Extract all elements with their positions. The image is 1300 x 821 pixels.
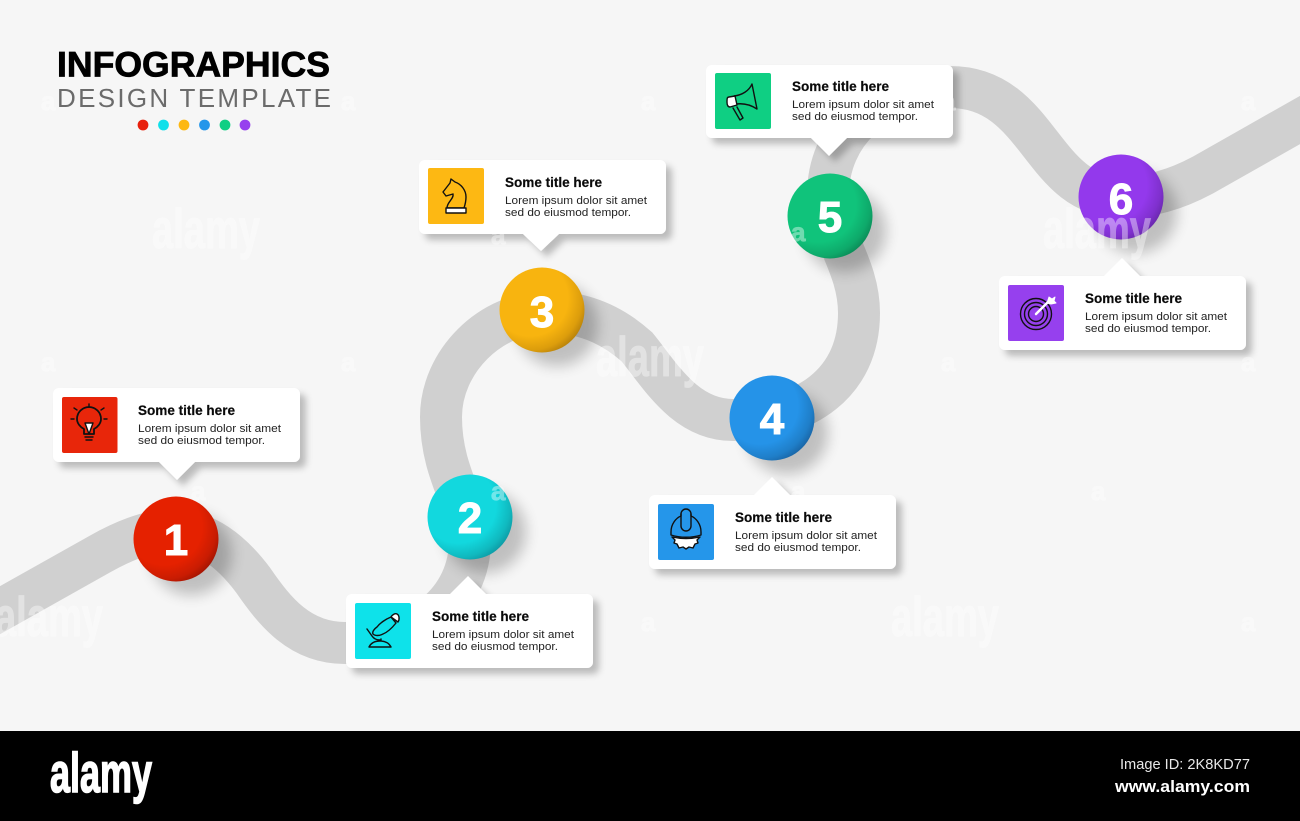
card 6: Lorem ipsum dolor sit amet xyxy=(1085,311,1227,323)
image id: Image ID: 2K8KD77 xyxy=(1120,756,1250,773)
ball shadows xyxy=(150,171,1177,595)
card 2: sed do eiusmod tempor. xyxy=(432,641,558,653)
watermarks: alamy xyxy=(596,325,704,388)
step 6 ball xyxy=(1078,154,1164,240)
icon: microscope xyxy=(367,614,399,647)
card 2: Lorem ipsum dolor sit amet xyxy=(432,629,574,641)
watermarks: a xyxy=(791,217,806,247)
card 2: Some title here xyxy=(432,609,529,624)
card 1 xyxy=(53,388,300,480)
step 4 ball: 4 xyxy=(760,395,785,444)
card 4: sed do eiusmod tempor. xyxy=(735,542,861,554)
step 5 ball: 5 xyxy=(818,193,842,242)
watermarks: alamy xyxy=(891,585,999,648)
step 2 ball xyxy=(428,474,512,560)
card 2 xyxy=(346,576,593,668)
winding road xyxy=(0,87,1300,643)
card 5: sed do eiusmod tempor. xyxy=(792,111,918,123)
icon: helmet and gear xyxy=(671,509,701,549)
watermarks: a xyxy=(491,220,506,250)
footer band xyxy=(0,731,1300,821)
card 6 xyxy=(999,258,1246,350)
watermarks: a xyxy=(791,476,806,506)
card 5 xyxy=(706,65,953,156)
step 6 ball: 6 xyxy=(1109,175,1133,224)
title block xyxy=(57,46,331,130)
card 4: Lorem ipsum dolor sit amet xyxy=(735,530,877,542)
watermarks: a xyxy=(1241,86,1256,116)
watermarks: a xyxy=(1241,347,1256,377)
website: www.alamy.com xyxy=(1114,777,1250,796)
watermarks: a xyxy=(1241,607,1256,637)
watermarks: a xyxy=(1091,476,1106,506)
step 3 ball xyxy=(500,268,584,352)
step 3 ball: 3 xyxy=(530,288,554,337)
card 4 xyxy=(649,477,896,569)
card 3 xyxy=(419,160,666,251)
icon: target and dart xyxy=(1020,297,1056,330)
watermarks: alamy xyxy=(152,197,260,260)
watermarks: a xyxy=(41,347,56,377)
icon: megaphone xyxy=(727,84,757,120)
card 1: Lorem ipsum dolor sit amet xyxy=(138,423,281,435)
watermarks: a xyxy=(491,476,506,506)
icon: chess knight xyxy=(443,179,466,213)
card 1: sed do eiusmod tempor. xyxy=(138,435,265,447)
card 4: Some title here xyxy=(735,510,832,525)
icon: light bulb xyxy=(71,404,107,440)
card 3: Some title here xyxy=(505,175,602,190)
card 5: Lorem ipsum dolor sit amet xyxy=(792,99,934,111)
watermarks: a xyxy=(641,607,656,637)
card 5: Some title here xyxy=(792,79,889,94)
step 2 ball: 2 xyxy=(458,494,482,543)
card 1: Some title here xyxy=(138,403,235,418)
step 4 ball xyxy=(730,376,814,460)
colour dots xyxy=(138,120,250,130)
watermarks: a xyxy=(41,86,56,116)
watermarks: a xyxy=(341,347,356,377)
watermarks: a xyxy=(941,86,956,116)
subtitle: DESIGN TEMPLATE xyxy=(57,83,331,113)
footer logo: alamy xyxy=(50,741,152,804)
watermarks: a xyxy=(341,86,356,116)
watermarks: a xyxy=(641,86,656,116)
step 1 ball xyxy=(134,496,218,582)
card 3: Lorem ipsum dolor sit amet xyxy=(505,195,647,207)
step 5 ball xyxy=(788,174,872,258)
card 3: sed do eiusmod tempor. xyxy=(505,207,631,219)
step 1 ball: 1 xyxy=(164,516,188,565)
watermarks: a xyxy=(191,476,206,506)
watermarks xyxy=(0,86,1256,648)
title: INFOGRAPHICS xyxy=(57,46,330,84)
watermarks: a xyxy=(941,347,956,377)
watermarks: alamy xyxy=(1043,197,1151,260)
card 6: Some title here xyxy=(1085,291,1182,306)
card 6: sed do eiusmod tempor. xyxy=(1085,323,1211,335)
